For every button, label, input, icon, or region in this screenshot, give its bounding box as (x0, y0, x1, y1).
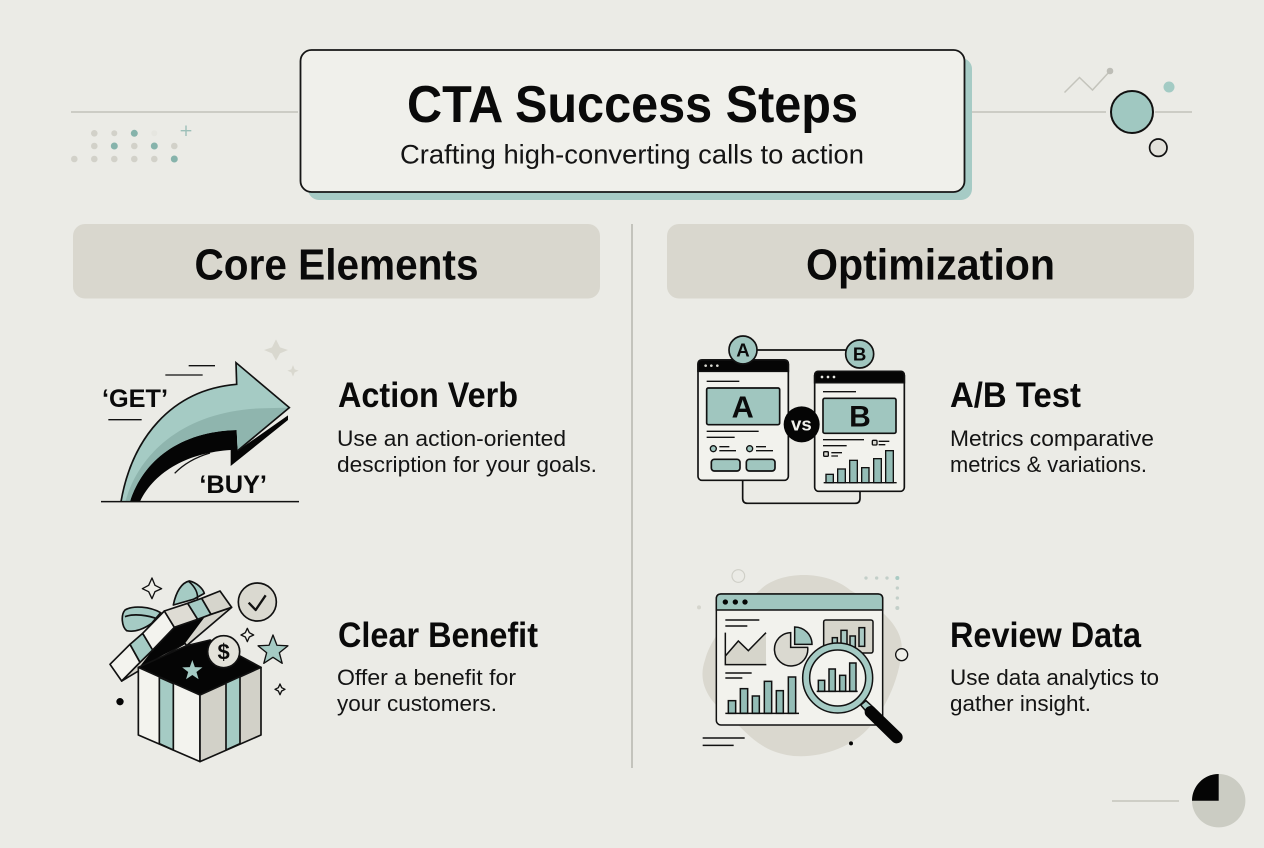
text block: A/B Test: A/B Test (950, 376, 1081, 415)
badge: B (846, 340, 874, 368)
icon: A/B test (698, 336, 904, 503)
panel heading: Core Elements (73, 224, 600, 298)
badge: VS: vs (791, 414, 812, 435)
text block: Action Verb: description for your goals. (337, 452, 597, 477)
badge: B: B (853, 344, 866, 365)
text block: Review Data: Review Data (950, 616, 1141, 655)
panel heading: Optimization (667, 224, 1194, 298)
dollar sign: $ (218, 639, 230, 664)
decoration: dot grid (71, 126, 191, 162)
title: CTA Success Steps (407, 76, 858, 134)
panel heading: Core Elements: Core Elements (194, 240, 478, 290)
text block: Action Verb: Use an action-oriented (337, 426, 566, 451)
window A: A (732, 390, 754, 424)
text block: Action Verb: Action Verb (338, 376, 518, 415)
text block: Clear Benefit: your customers. (337, 691, 497, 716)
decoration: corner pie (1112, 774, 1245, 827)
window B: B (849, 401, 871, 434)
text block: Clear Benefit: Clear Benefit (338, 616, 538, 655)
badge: A (729, 336, 757, 364)
label: GET: ‘GET’ (102, 385, 168, 413)
subtitle: Crafting high-converting calls to action (400, 140, 864, 170)
badge: A: A (736, 340, 750, 361)
text block: A/B Test: metrics & variations. (950, 452, 1147, 477)
window B (815, 371, 904, 491)
icon: gift box (110, 578, 288, 762)
window A (698, 360, 788, 480)
badge: VS (784, 406, 820, 442)
text block: A/B Test: Metrics comparative (950, 426, 1154, 451)
icon: action verb arrow (101, 339, 299, 502)
text block: Review Data: gather insight. (950, 691, 1091, 716)
text block: Clear Benefit: Offer a benefit for (337, 665, 517, 690)
decorative header line (71, 111, 1192, 113)
panel heading: Optimization: Optimization (806, 240, 1055, 290)
label: BUY: ‘BUY’ (199, 471, 267, 499)
text block: Clear Benefit (337, 616, 538, 716)
text block: Action Verb (337, 376, 597, 477)
text block: A/B Test (950, 376, 1154, 477)
magnifying glass (803, 643, 897, 737)
title panel (300, 50, 972, 200)
icon: review data dashboard (697, 570, 908, 756)
text block: Review Data (950, 616, 1159, 716)
decoration: circles and trend line (1064, 68, 1174, 156)
text block: Review Data: Use data analytics to (950, 665, 1159, 690)
